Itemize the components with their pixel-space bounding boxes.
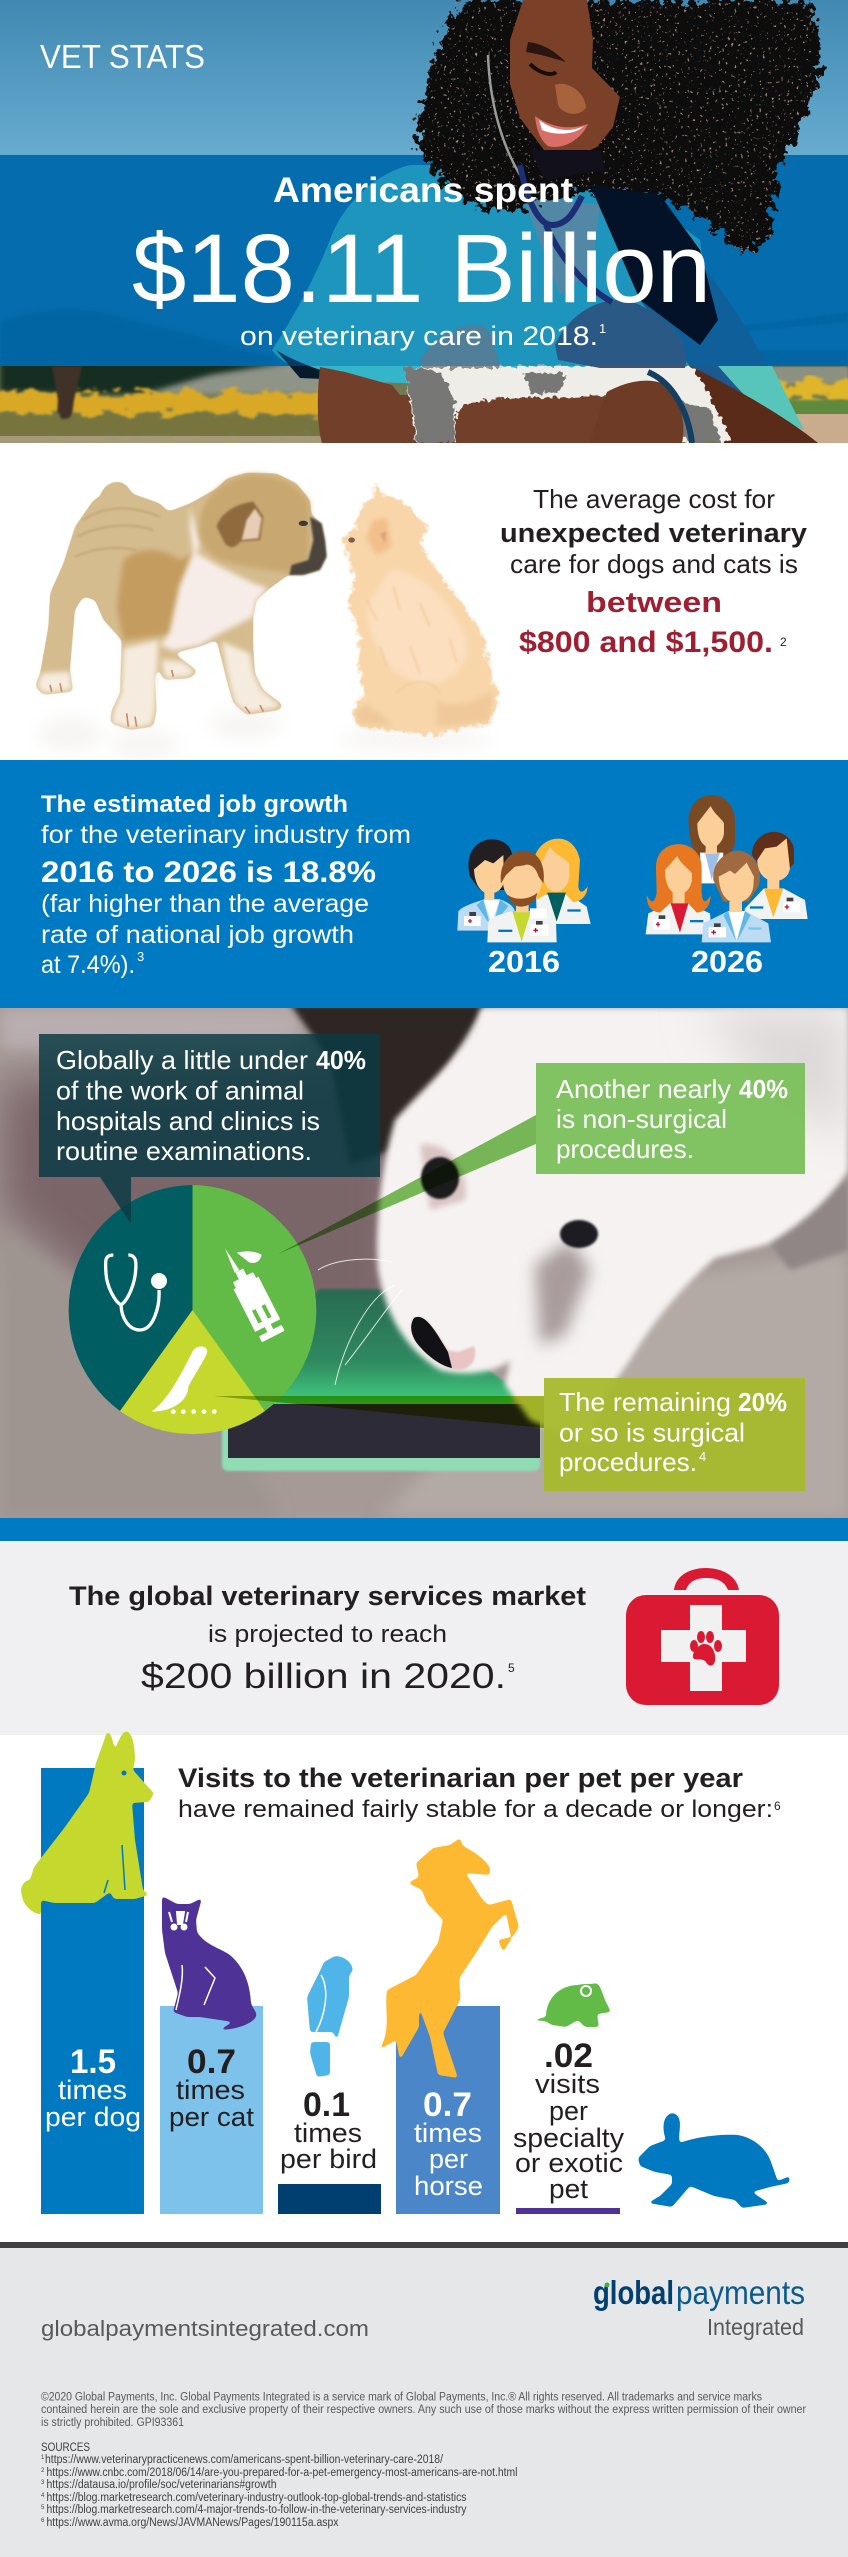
panel: types of work bbox=[0, 1004, 848, 1518]
bar label: dog bbox=[45, 2043, 141, 2132]
sources: https://www.cnbc.com/2018/06/14/are-you-prepared-for-a-pet-emergency-most-americans-are-not.html bbox=[46, 2467, 518, 2479]
bar label: horse bbox=[414, 2086, 483, 2201]
sources: SOURCES bbox=[41, 2440, 90, 2454]
bar label: specialty or exotic pet: pet bbox=[549, 2174, 589, 2204]
bar label: specialty or exotic pet: visits bbox=[535, 2069, 600, 2099]
text: job growth bbox=[41, 791, 411, 979]
sources: 6 bbox=[41, 2518, 45, 2524]
bar: dog bbox=[41, 1768, 144, 2214]
sources: https://blog.marketresearch.com/4-major-trends-to-follow-in-the-veterinary-services-industry bbox=[46, 2504, 467, 2516]
slice: routine examinations bbox=[69, 1185, 192, 1411]
callout: routine examinations: Globally a little under bbox=[56, 1045, 308, 1075]
logo: Global Payments Integrated: payments bbox=[676, 2274, 805, 2311]
callout pointer: non-surgical bbox=[278, 1115, 536, 1254]
callout: surgical procedures: procedures. bbox=[559, 1447, 697, 1477]
callout: non-surgical procedures: Another nearly bbox=[556, 1074, 731, 1104]
text: global market: is projected to reach bbox=[208, 1621, 447, 1648]
heading: visits bbox=[178, 1763, 781, 1823]
callout: surgical procedures: or so is surgical bbox=[559, 1418, 745, 1448]
text: job growth: The estimated job growth bbox=[41, 791, 348, 818]
panel: visits per pet bbox=[21, 1731, 790, 2214]
bar label: specialty or exotic pet: per bbox=[549, 2096, 588, 2126]
bar: horse bbox=[396, 2006, 500, 2214]
callout: routine examinations: of the work of animal bbox=[56, 1076, 304, 1106]
slice: surgical procedures bbox=[120, 1310, 265, 1434]
sources: https://www.avma.org/News/JAVMANews/Pages/190115a.aspx bbox=[46, 2517, 339, 2529]
bar label: dog: 1.5 bbox=[70, 2043, 116, 2081]
sources: 4 bbox=[41, 2493, 45, 2499]
bar label: bird: per bird bbox=[280, 2144, 377, 2174]
bar label: bird: times bbox=[294, 2118, 362, 2148]
big number: $18.11 Billion: $18.11 Billion bbox=[132, 214, 711, 323]
text: on veterinary care: on veterinary care in 2018. bbox=[240, 321, 598, 351]
icon: mouse bbox=[527, 1983, 611, 2027]
text: job growth: (far higher than the average bbox=[41, 890, 369, 918]
highlight: cost range: $800 and $1,500. bbox=[519, 626, 773, 659]
hero background: sky bbox=[0, 0, 848, 352]
legal text bbox=[41, 2392, 806, 2429]
bar: specialty or exotic pet bbox=[516, 2208, 620, 2214]
text: global market bbox=[69, 1581, 586, 1696]
heading: Americans spent: Americans spent bbox=[273, 171, 573, 210]
legal text: ©2020 Global Payments, Inc. Global Payments Integrated is a service mark of Global Payments, Inc.® All rights reserved. All trademarks and service marks bbox=[41, 2392, 762, 2404]
bar label: horse: horse bbox=[414, 2171, 483, 2201]
icon: syringe bbox=[225, 1248, 286, 1343]
text: average cost: care for dogs and cats is bbox=[510, 549, 798, 579]
logo: Global Payments Integrated: global bbox=[593, 2274, 674, 2311]
logo: Global Payments Integrated bbox=[593, 2274, 805, 2340]
callout: surgical procedures: The remaining bbox=[559, 1387, 731, 1417]
bar: bird bbox=[278, 2184, 381, 2214]
slice: non-surgical procedures bbox=[192, 1185, 316, 1411]
sources: 2 bbox=[41, 2468, 45, 2474]
sources: 3 bbox=[41, 2480, 45, 2486]
bar label: bird bbox=[280, 2086, 377, 2174]
highlight: cost range: between bbox=[586, 587, 722, 619]
bar label: cat: per cat bbox=[169, 2102, 255, 2132]
bar label: horse: 0.7 bbox=[423, 2086, 472, 2124]
callout: surgical procedures bbox=[544, 1378, 805, 1491]
bar label: cat bbox=[169, 2043, 255, 2132]
bar label: bird: 0.1 bbox=[303, 2086, 350, 2124]
heading: visits: have remained fairly stable for a decade or longer: bbox=[178, 1796, 773, 1823]
pie chart bbox=[69, 1185, 316, 1434]
bar label: specialty or exotic pet: .02 bbox=[544, 2037, 593, 2075]
sources: 5 bbox=[41, 2505, 45, 2511]
label: 2026: 2026 bbox=[691, 944, 763, 979]
icon: 2016 veterinary team bbox=[457, 839, 591, 942]
photo: puppy on a tablet bbox=[0, 1004, 848, 1518]
bar label: specialty or exotic pet bbox=[513, 2037, 625, 2204]
callout: routine examinations: routine examinations. bbox=[56, 1136, 312, 1166]
text: average cost: unexpected veterinary bbox=[500, 518, 807, 548]
callout: routine examinations: hospitals and clinics is bbox=[56, 1106, 320, 1136]
bar: cat bbox=[160, 2006, 263, 2214]
bar label: specialty or exotic pet: specialty bbox=[513, 2123, 625, 2153]
callout: non-surgical procedures: procedures. bbox=[556, 1134, 694, 1164]
callout: surgical procedures: 4 bbox=[699, 1449, 706, 1464]
legal text: contained herein are the sole and exclusive property of their respective owners. Any such use of those marks without the express written permission of their owner bbox=[41, 2404, 806, 2416]
sources: https://www.veterinarypracticenews.com/americans-spent-billion-veterinary-care-2018/ bbox=[45, 2454, 444, 2466]
callout: routine examinations: 40% bbox=[316, 1045, 366, 1075]
icon: horse bbox=[379, 1838, 519, 2078]
text: on veterinary care: 1 bbox=[599, 321, 606, 336]
icon: dog bbox=[21, 1731, 154, 1915]
icon: cat bbox=[162, 1896, 256, 2030]
logo: Global Payments Integrated: Integrated bbox=[707, 2314, 804, 2340]
photo: vet's body holding a cat bbox=[272, 165, 818, 443]
legal text: is strictly prohibited. GPI93361 bbox=[41, 2417, 184, 2429]
callout pointer: surgical bbox=[214, 1396, 544, 1428]
market background bbox=[0, 1541, 848, 1735]
icon: parrot bbox=[307, 1956, 353, 2077]
text: job growth: for the veterinary industry from bbox=[41, 821, 411, 849]
text: job growth: rate of national job growth bbox=[41, 921, 354, 949]
bar label: specialty or exotic pet: or exotic bbox=[515, 2148, 623, 2178]
text: job growth: 2016 to 2026 is 18.8% bbox=[41, 856, 376, 889]
panel: unexpected cost bbox=[35, 473, 807, 759]
website: globalpaymentsintegrated.com bbox=[41, 2316, 369, 2341]
callout: non-surgical procedures: is non-surgical bbox=[556, 1104, 727, 1134]
blue divider band bbox=[0, 1518, 848, 1541]
photo: vet's hair and face bbox=[417, 0, 821, 345]
text: average cost bbox=[500, 484, 807, 579]
icon: 2026 veterinary team bbox=[646, 795, 808, 942]
photo: puppy and kitten bbox=[35, 473, 500, 759]
callout: non-surgical procedures: 40% bbox=[739, 1074, 788, 1104]
hero blue band base bbox=[0, 155, 848, 366]
bar label: dog: times bbox=[58, 2075, 127, 2105]
callout: non-surgical procedures bbox=[536, 1063, 805, 1174]
icon: first aid kit bbox=[626, 1568, 779, 1705]
kitten bbox=[342, 487, 500, 735]
sources: 1 bbox=[41, 2455, 45, 2461]
puppy bbox=[35, 473, 327, 730]
bar label: cat: times bbox=[176, 2075, 245, 2105]
sources bbox=[41, 2440, 518, 2529]
bar label: dog: per dog bbox=[45, 2102, 141, 2132]
job growth background bbox=[0, 760, 848, 1008]
sources: https://datausa.io/profile/soc/veterinarians#growth bbox=[46, 2479, 276, 2491]
panel: global market bbox=[0, 1541, 848, 1735]
callout: routine examinations bbox=[39, 1034, 380, 1224]
text: average cost: The average cost for bbox=[533, 484, 775, 514]
icon: stethoscope bbox=[106, 1255, 165, 1330]
label: VET STATS: VET STATS bbox=[40, 38, 205, 75]
heading: visits: Visits to the veterinarian per pet per year bbox=[178, 1763, 744, 1793]
footer top rule bbox=[0, 2242, 848, 2248]
highlight: cost range: 2 bbox=[780, 635, 787, 649]
footer background bbox=[0, 2248, 848, 2557]
highlight: cost range bbox=[519, 587, 787, 659]
text: global market: The global veterinary services market bbox=[69, 1581, 586, 1611]
hero background: field and trees bbox=[0, 309, 848, 444]
icon: scalpel bbox=[152, 1346, 217, 1414]
text: job growth: at 7.4%). bbox=[41, 951, 135, 979]
sources: https://blog.marketresearch.com/veterinary-industry-outlook-top-global-trends-and-statistics bbox=[46, 2492, 467, 2504]
label: 2016: 2016 bbox=[488, 944, 560, 979]
hero blue band tint bbox=[272, 165, 768, 366]
text: global market: $200 billion in 2020. bbox=[141, 1657, 506, 1696]
bar label: horse: per bbox=[429, 2144, 468, 2174]
panel: footer bbox=[0, 2242, 848, 2557]
panel: job growth bbox=[0, 760, 848, 1008]
bar label: cat: 0.7 bbox=[187, 2043, 236, 2081]
icon: rabbit bbox=[638, 2113, 790, 2208]
panel: hero bbox=[0, 0, 848, 444]
bar label: horse: times bbox=[414, 2118, 482, 2148]
heading: visits: 6 bbox=[774, 1799, 781, 1813]
text: global market: 5 bbox=[508, 1661, 515, 1675]
callout: surgical procedures: 20% bbox=[738, 1387, 787, 1417]
text: job growth: 3 bbox=[137, 949, 144, 964]
